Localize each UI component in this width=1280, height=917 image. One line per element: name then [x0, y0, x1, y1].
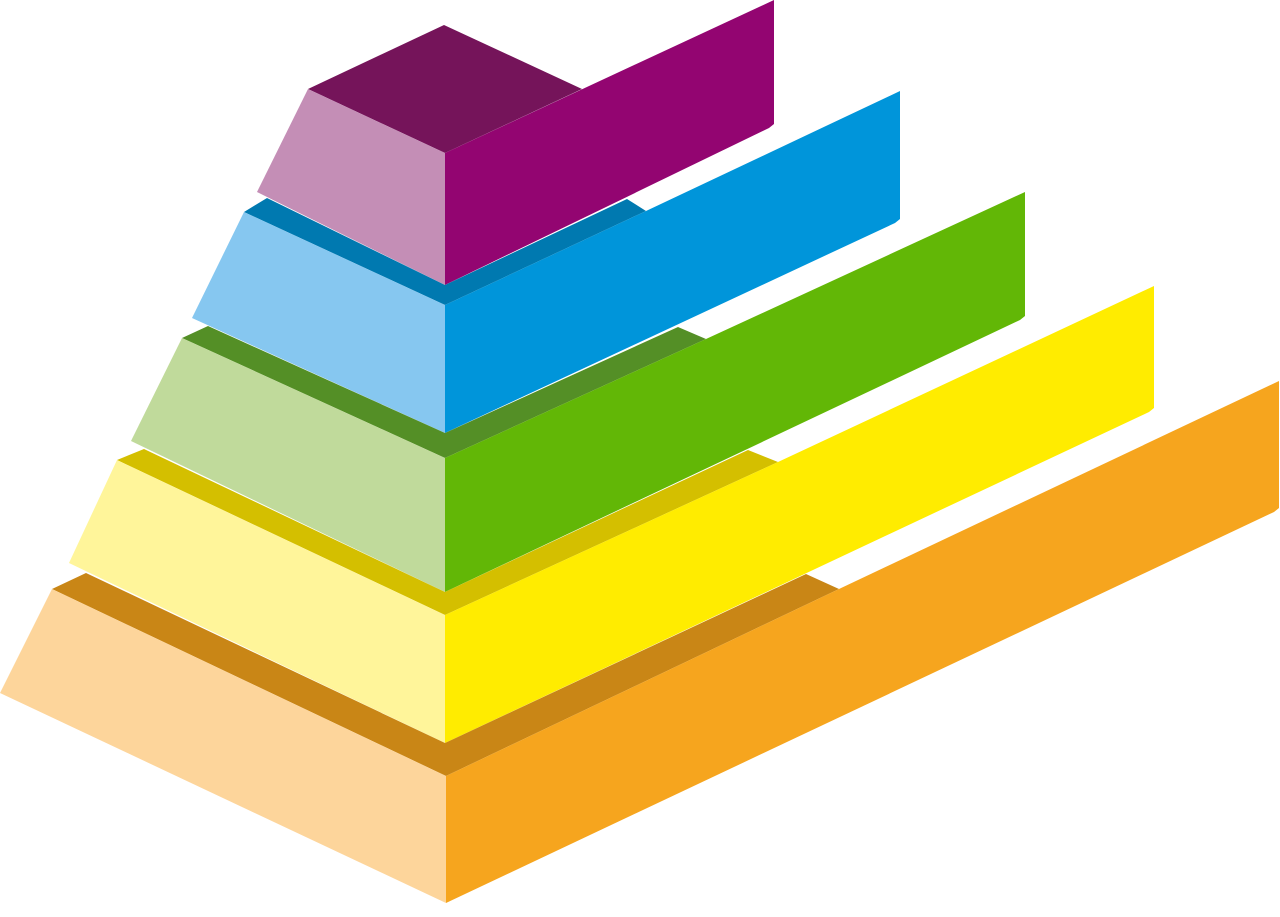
top strip dark orange [52, 573, 839, 776]
right face green [445, 192, 1025, 592]
layer 5: orange base block [0, 381, 1279, 903]
left face light yellow [69, 460, 445, 743]
right face magenta [445, 0, 774, 285]
layer 3: green block [131, 192, 1025, 592]
left face peach [0, 589, 446, 903]
layer 1: purple top block [257, 0, 774, 285]
left face light green [131, 338, 445, 592]
right face yellow [445, 286, 1154, 743]
right face orange [446, 381, 1279, 903]
top face dark purple [308, 25, 582, 153]
top strip dark green [182, 326, 706, 458]
top strip dark yellow [117, 449, 778, 615]
top strip dark blue [244, 198, 646, 305]
layer 2: blue block [192, 91, 900, 433]
left face light blue [192, 212, 445, 433]
layer 4: yellow block [69, 286, 1154, 743]
right face blue [445, 91, 900, 433]
left face pink [257, 89, 445, 285]
